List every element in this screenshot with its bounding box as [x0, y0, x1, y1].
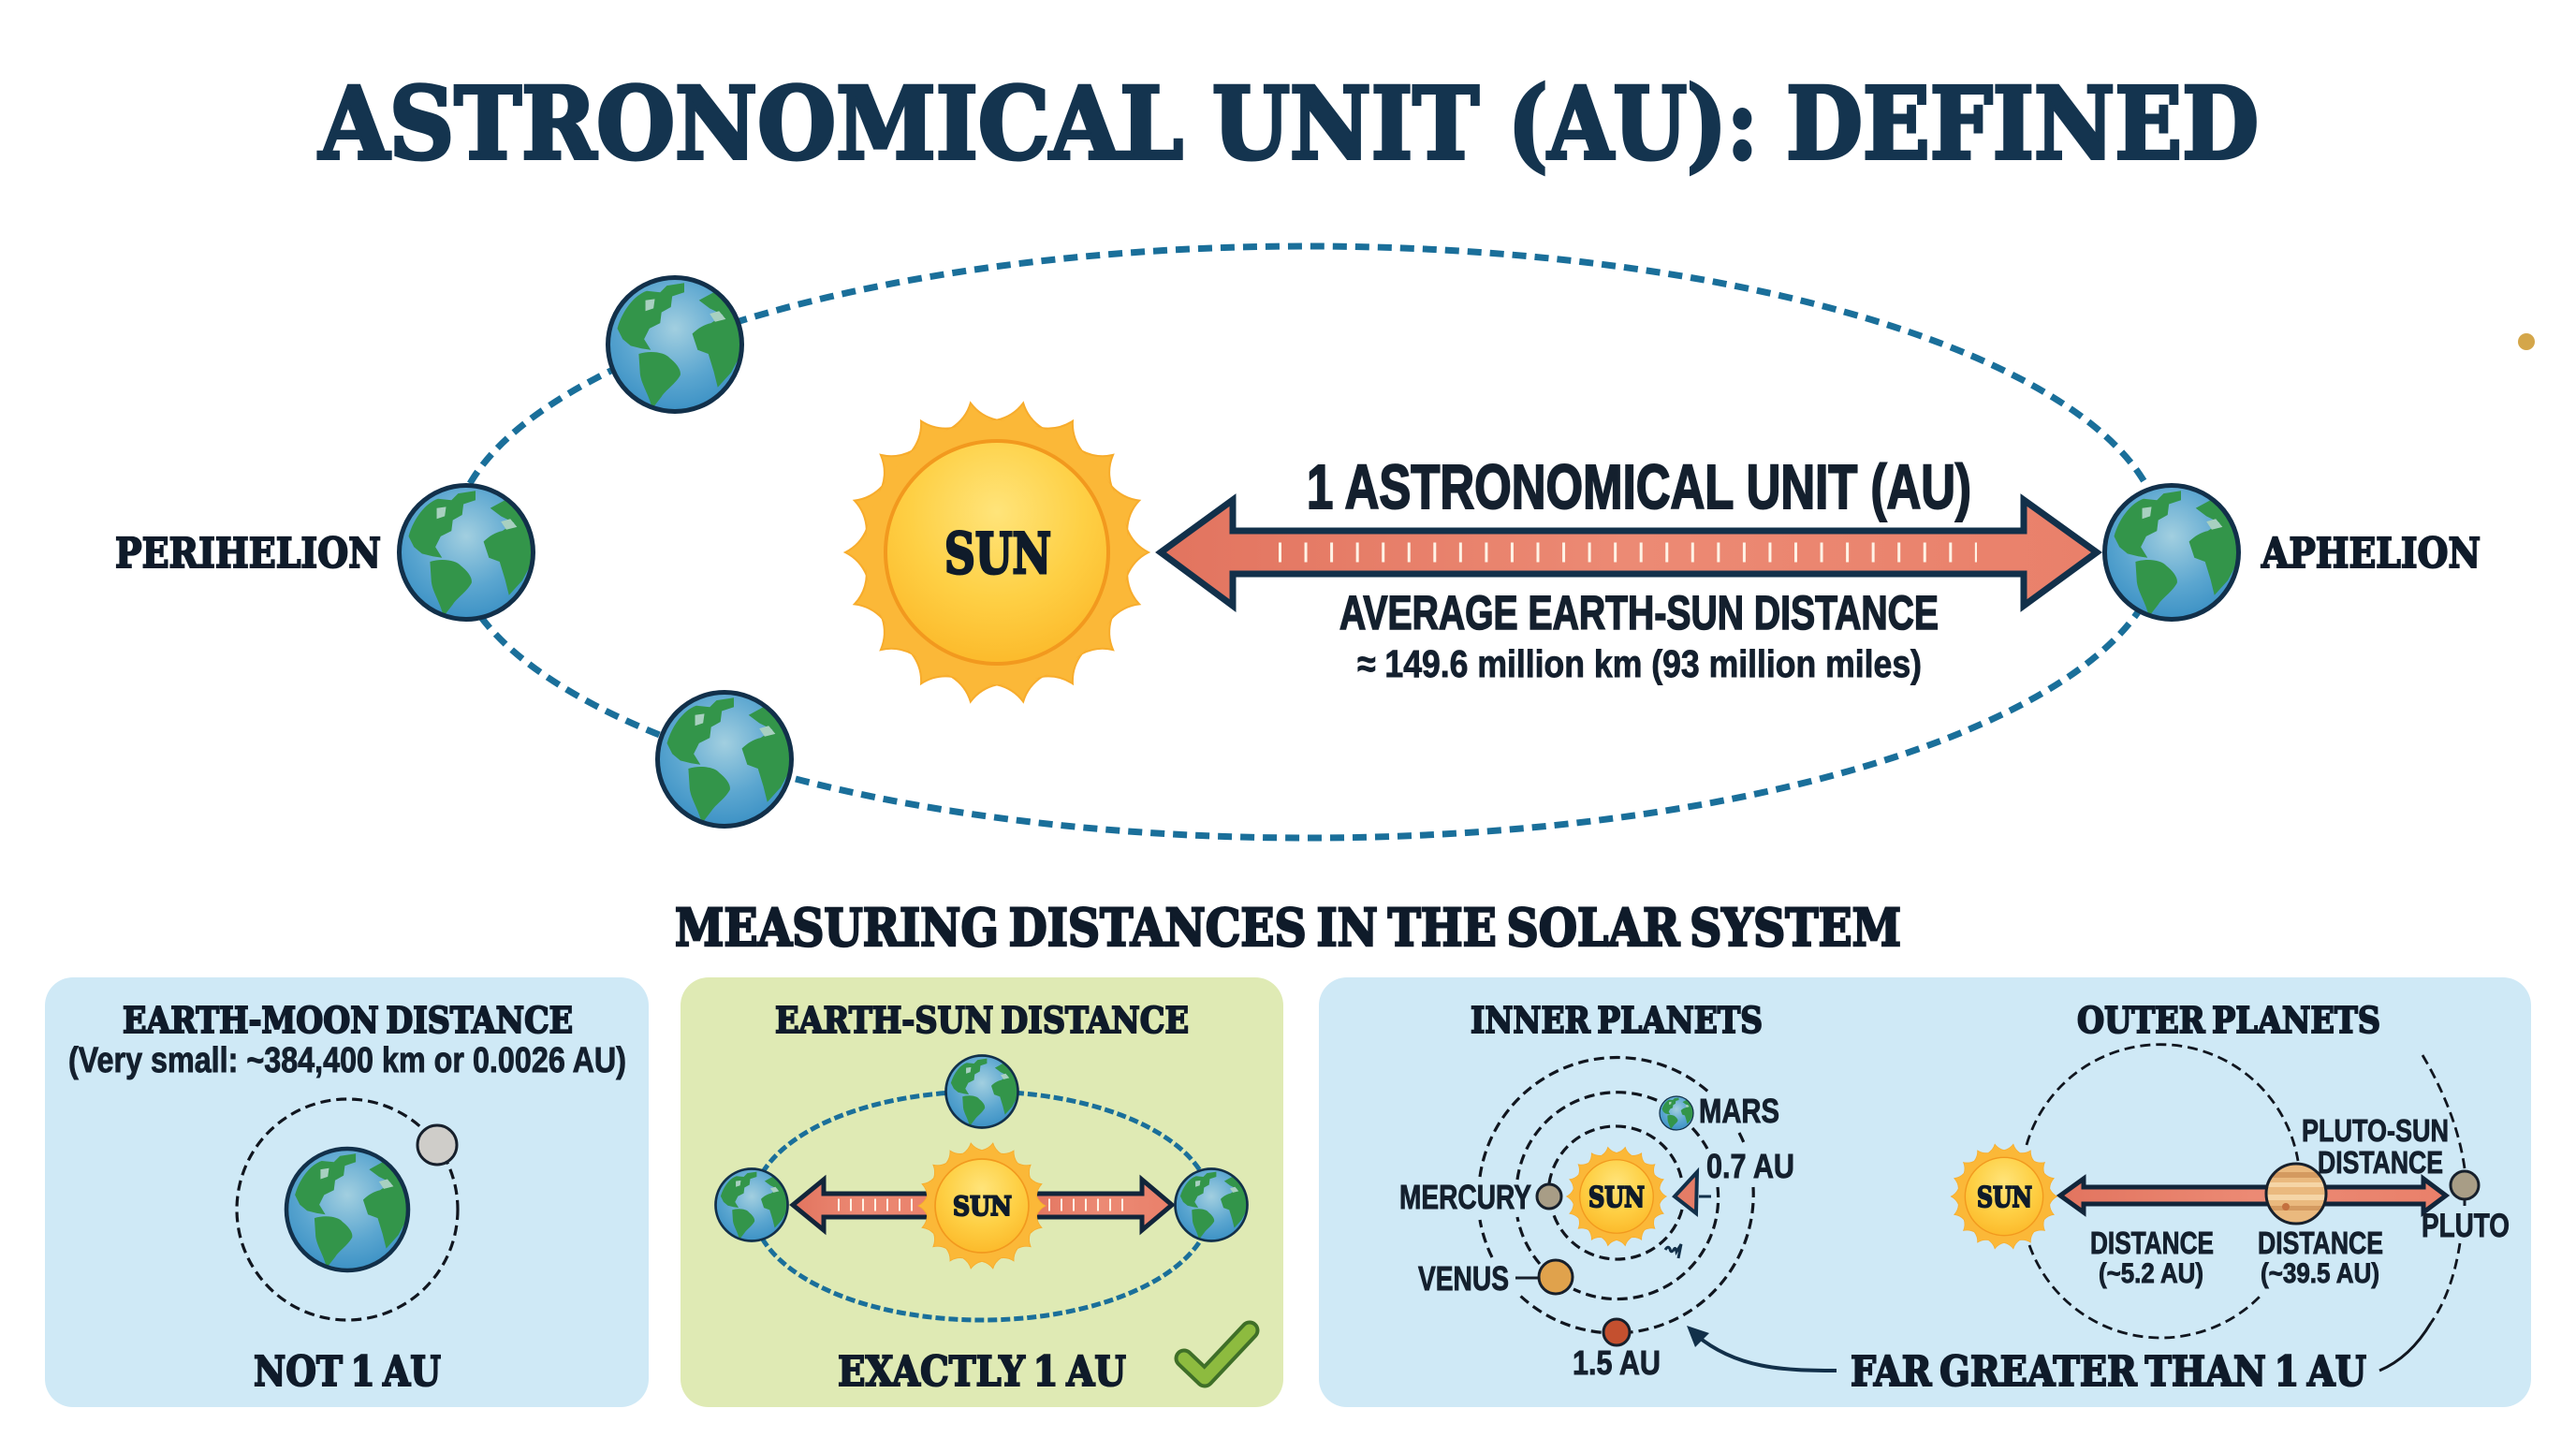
title: DEFINED: [1786, 65, 2259, 182]
icon: Earth top: [945, 1056, 1018, 1127]
text: distance value: ≈ 149.6 million km (93 million miles): [1357, 642, 1922, 685]
connector curve: [2379, 1323, 2431, 1371]
icon: Earth at perihelion: [399, 485, 534, 620]
heading: outer planets: OUTER PLANETS: [2077, 999, 2380, 1041]
label: Pluto-Sun distance: DISTANCE: [2318, 1145, 2443, 1180]
moon orbit: [237, 1099, 458, 1320]
icon: Sun: [845, 399, 1149, 706]
icon: check mark: [1184, 1330, 1250, 1378]
label: Venus: VENUS: [1418, 1259, 1509, 1298]
heading: EARTH-SUN DISTANCE: [775, 999, 1189, 1041]
icon: Earth right: [1176, 1168, 1247, 1241]
heading: 1 astronomical unit: 1 ASTRONOMICAL UNIT (AU): [1307, 452, 1971, 522]
icon: Earth at aphelion: [2104, 485, 2239, 620]
panel: Earth-Sun distance: [681, 977, 1283, 1407]
arrow: curved pointer: [1687, 1326, 1837, 1371]
arrow: Sun to Pluto: [2060, 1179, 2446, 1212]
icon: Sun outer: SUN: [1977, 1181, 2032, 1214]
icon: small arrow: [1665, 1172, 1711, 1258]
icon: Sun: [918, 1141, 1046, 1270]
icon: Sun inner: [1567, 1146, 1666, 1247]
label: Pluto: PLUTO: [2422, 1208, 2510, 1244]
arrow: 1 AU distance: [1161, 500, 2097, 606]
callout text: FAR GREATER THAN 1 AU: [1851, 1348, 2366, 1396]
label: Pluto distance: DISTANCE: [2258, 1225, 2383, 1260]
label: 1.5 AU: 1.5 AU: [1573, 1343, 1661, 1382]
subheading: (Very small: ~384,400 km or 0.0026 AU): [68, 1041, 626, 1080]
verdict: EXACTLY 1 AU: [838, 1348, 1126, 1396]
icon: Mercury: [1537, 1184, 1561, 1209]
panel: inner and outer planets: [1319, 977, 2531, 1407]
icon: Sun outer: [1951, 1143, 2057, 1250]
outer planet orbits: [2027, 1045, 2465, 1338]
label: 0.7 AU: 0.7 AU: [1706, 1147, 1794, 1185]
icon: Jupiter: [2265, 1164, 2327, 1224]
label: Pluto-Sun distance: [2302, 1113, 2449, 1180]
title: UNIT: [1212, 65, 1479, 182]
icon: Venus: [1539, 1260, 1573, 1294]
label: Mars: MARS: [1699, 1092, 1779, 1130]
icon: Earth-like Mars: [1660, 1096, 1693, 1130]
icon: Sun: SUN: [944, 521, 1051, 587]
verdict: NOT 1 AU: [254, 1348, 441, 1396]
icon: Moon: [417, 1125, 457, 1165]
inner planet orbits: [1480, 1058, 1753, 1333]
heading: inner planets: INNER PLANETS: [1471, 999, 1763, 1041]
icon: Pluto: [2451, 1171, 2479, 1206]
title: ASTRONOMICAL: [318, 65, 1183, 182]
icon: Earth left: [715, 1168, 788, 1241]
label: Pluto-Sun distance: PLUTO-SUN: [2302, 1113, 2449, 1148]
label: Pluto distance: (~39.5 AU): [2261, 1258, 2379, 1289]
icon: red planet: [1603, 1319, 1630, 1345]
label: Mercury: MERCURY: [1399, 1178, 1531, 1216]
title: [318, 65, 2259, 182]
icon: Sun inner: SUN: [1588, 1181, 1645, 1214]
arrow: left: [793, 1180, 936, 1230]
icon: Earth: [286, 1149, 408, 1270]
decorative dot: [2518, 333, 2535, 350]
arrow: right: [1030, 1180, 1172, 1230]
panel: Earth's orbit diagram: [115, 246, 2481, 838]
label: Jupiter distance: DISTANCE: [2090, 1225, 2214, 1260]
icon: Earth top left: [608, 277, 741, 412]
label: Pluto distance: [2258, 1225, 2383, 1289]
panel: Earth-Moon distance: [45, 977, 649, 1407]
label: aphelion: APHELION: [2261, 530, 2481, 578]
text: average Earth-Sun distance: AVERAGE EARTH-SUN DISTANCE: [1339, 586, 1939, 639]
icon: Earth bottom left: [657, 693, 792, 826]
icon: Sun: SUN: [953, 1191, 1012, 1222]
heading: EARTH-MOON DISTANCE: [123, 999, 573, 1041]
label: Jupiter distance: [2090, 1225, 2214, 1289]
label: Jupiter distance: (~5.2 AU): [2099, 1258, 2203, 1289]
section heading: MEASURING DISTANCES IN THE SOLAR SYSTEM: [675, 897, 1901, 958]
label: perihelion: PERIHELION: [115, 530, 381, 578]
orbit: [753, 1092, 1211, 1320]
orbit path: [453, 246, 2162, 838]
title: (AU):: [1508, 65, 1758, 182]
